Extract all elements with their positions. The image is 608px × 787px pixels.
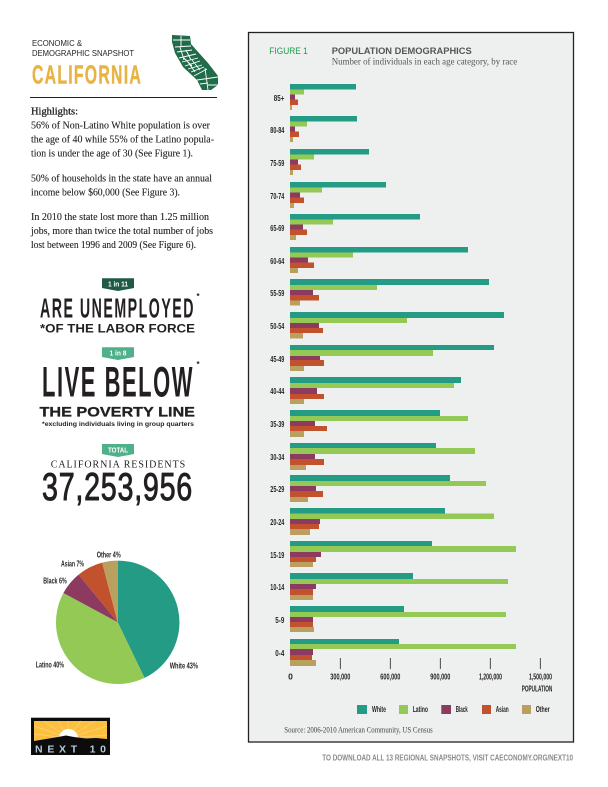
stat: unemployment: 1 in 11 (108, 280, 128, 288)
chart heading: POPULATION DEMOGRAPHICS (332, 46, 472, 57)
row: 5-9: 5-9 (275, 615, 284, 625)
row: 70-74 (270, 182, 386, 208)
legend: Latino (413, 704, 428, 714)
legend: White (372, 704, 386, 714)
row: 30-34: 30-34 (270, 452, 284, 462)
row: 55-59: 55-59 (270, 288, 284, 298)
row: 50-54 (270, 312, 504, 338)
logo: Next 10 (31, 718, 110, 756)
chart heading: FIGURE 1 (269, 46, 308, 56)
row: 70-74: 70-74 (270, 191, 284, 201)
row: 60-64: 60-64 (270, 256, 284, 266)
pie chart: population by race: Latino 40% (36, 660, 64, 670)
chart axis: population scale: 600,000 (380, 671, 400, 681)
row: 15-19 (270, 541, 516, 567)
chart axis: population scale: 0 (288, 671, 293, 681)
row: 80-84 (270, 116, 357, 142)
text block: highlights: the age of 40 while 55% of the Latino popula- (31, 134, 214, 146)
pie chart: population by race (36, 550, 198, 684)
row: 10-14 (270, 573, 508, 600)
chart axis: population scale: 1,200,000 (479, 671, 502, 681)
row: 45-49: 45-49 (270, 354, 284, 364)
pie chart: population by race: Other 4% (97, 550, 121, 560)
row: 80-84: 80-84 (270, 125, 284, 135)
text block: highlights: lost between 1996 and 2009 (See Figure 6). (31, 240, 196, 251)
chart axis: population scale: 900,000 (430, 671, 450, 681)
row: 85+: 85+ (274, 93, 284, 103)
row: 60-64 (270, 247, 468, 273)
legend: Asian (496, 704, 509, 714)
row: 30-34 (270, 443, 475, 470)
stat: poverty: * (196, 360, 200, 369)
chart axis: population scale (288, 658, 552, 694)
text block: highlights: jobs, more than twice the total number of jobs (30, 226, 213, 237)
row: 25-29 (270, 475, 486, 502)
pie chart: population by race: Black 6% (43, 576, 67, 586)
row: 45-49 (270, 345, 494, 371)
pie chart: population by race: White 43% (170, 661, 198, 671)
row: 0-4 (275, 639, 516, 666)
chart heading: Number of individuals in each age category, by race (332, 57, 517, 67)
chart heading (269, 46, 517, 67)
row: 50-54: 50-54 (270, 321, 284, 331)
stat: unemployment: *OF THE LABOR FORCE (40, 323, 195, 335)
header: snapshot title: ECONOMIC & (32, 38, 82, 48)
text block: highlights: income below $60,000 (See Figure 3). (31, 188, 180, 198)
panel: figure 1 population demographics (248, 32, 574, 742)
row: 15-19: 15-19 (270, 550, 284, 560)
stat: unemployment (40, 278, 200, 335)
logo: Next 10: NEXT 10 (35, 744, 106, 756)
stat: unemployment: * (196, 292, 200, 301)
stat: poverty: *excluding individuals living in group quarters (42, 421, 194, 428)
row: 5-9 (275, 606, 506, 632)
chart axis: population scale: 300,000 (330, 671, 350, 681)
stat: total residents: TOTAL (108, 446, 128, 454)
stat: total residents: CALIFORNIA RESIDENTS (51, 459, 185, 470)
legend: Other (536, 704, 550, 714)
text block: highlights: Highlights: (31, 106, 78, 118)
row: 35-39 (270, 410, 468, 437)
stat: total residents (42, 444, 193, 509)
row: 75-79: 75-59 (270, 158, 284, 168)
divider rule (30, 97, 217, 98)
row: 65-69 (270, 214, 420, 240)
text block: highlights (30, 106, 214, 251)
header: snapshot title: CALIFORNIA (32, 62, 142, 90)
text block: highlights: tion is under the age of 30 (See Figure 1). (31, 148, 193, 160)
bar chart: population by age and race (270, 84, 516, 666)
row: 10-14: 10-14 (270, 582, 284, 592)
row: 75-79 (270, 149, 369, 175)
stat: unemployment: ARE UNEMPLOYED (40, 293, 195, 324)
row: 20-24 (270, 508, 494, 535)
stat: total residents: 37,253,956 (42, 466, 193, 509)
header: snapshot title: DEMOGRAPHIC SNAPSHOT (32, 48, 134, 58)
row: 20-24: 20-24 (270, 517, 284, 527)
row: 35-39: 35-39 (270, 419, 284, 429)
text block: highlights: In 2010 the state lost more than 1.25 million (31, 212, 209, 223)
stat: poverty: THE POVERTY LINE (40, 404, 195, 420)
legend (357, 704, 550, 714)
row: 0-4: 0-4 (275, 648, 284, 658)
row: 25-29: 25-29 (270, 484, 284, 494)
legend: Black (456, 704, 468, 714)
stat: poverty: 1 in 8 (110, 348, 126, 358)
header: snapshot title (32, 38, 142, 90)
chart axis: population scale: 1,500,000 (529, 671, 552, 681)
icon: California county map (172, 35, 218, 90)
stat: poverty (40, 347, 200, 428)
row: 40-44: 40-44 (270, 386, 284, 396)
text block: highlights: 56% of Non-Latino White population is over (31, 120, 211, 132)
text block: highlights: 50% of households in the state have an annual (31, 174, 212, 184)
stat: poverty: LIVE BELOW (42, 359, 194, 407)
row: 40-44 (270, 377, 461, 404)
row: 65-69: 65-69 (270, 223, 284, 233)
row: 85+ (274, 84, 356, 110)
source note: Source: 2006-2010 American Community, US Census (284, 726, 433, 735)
chart axis: population scale: POPULATION (522, 684, 552, 694)
pie chart: population by race: Asian 7% (61, 559, 84, 569)
row: 55-59 (270, 279, 489, 306)
